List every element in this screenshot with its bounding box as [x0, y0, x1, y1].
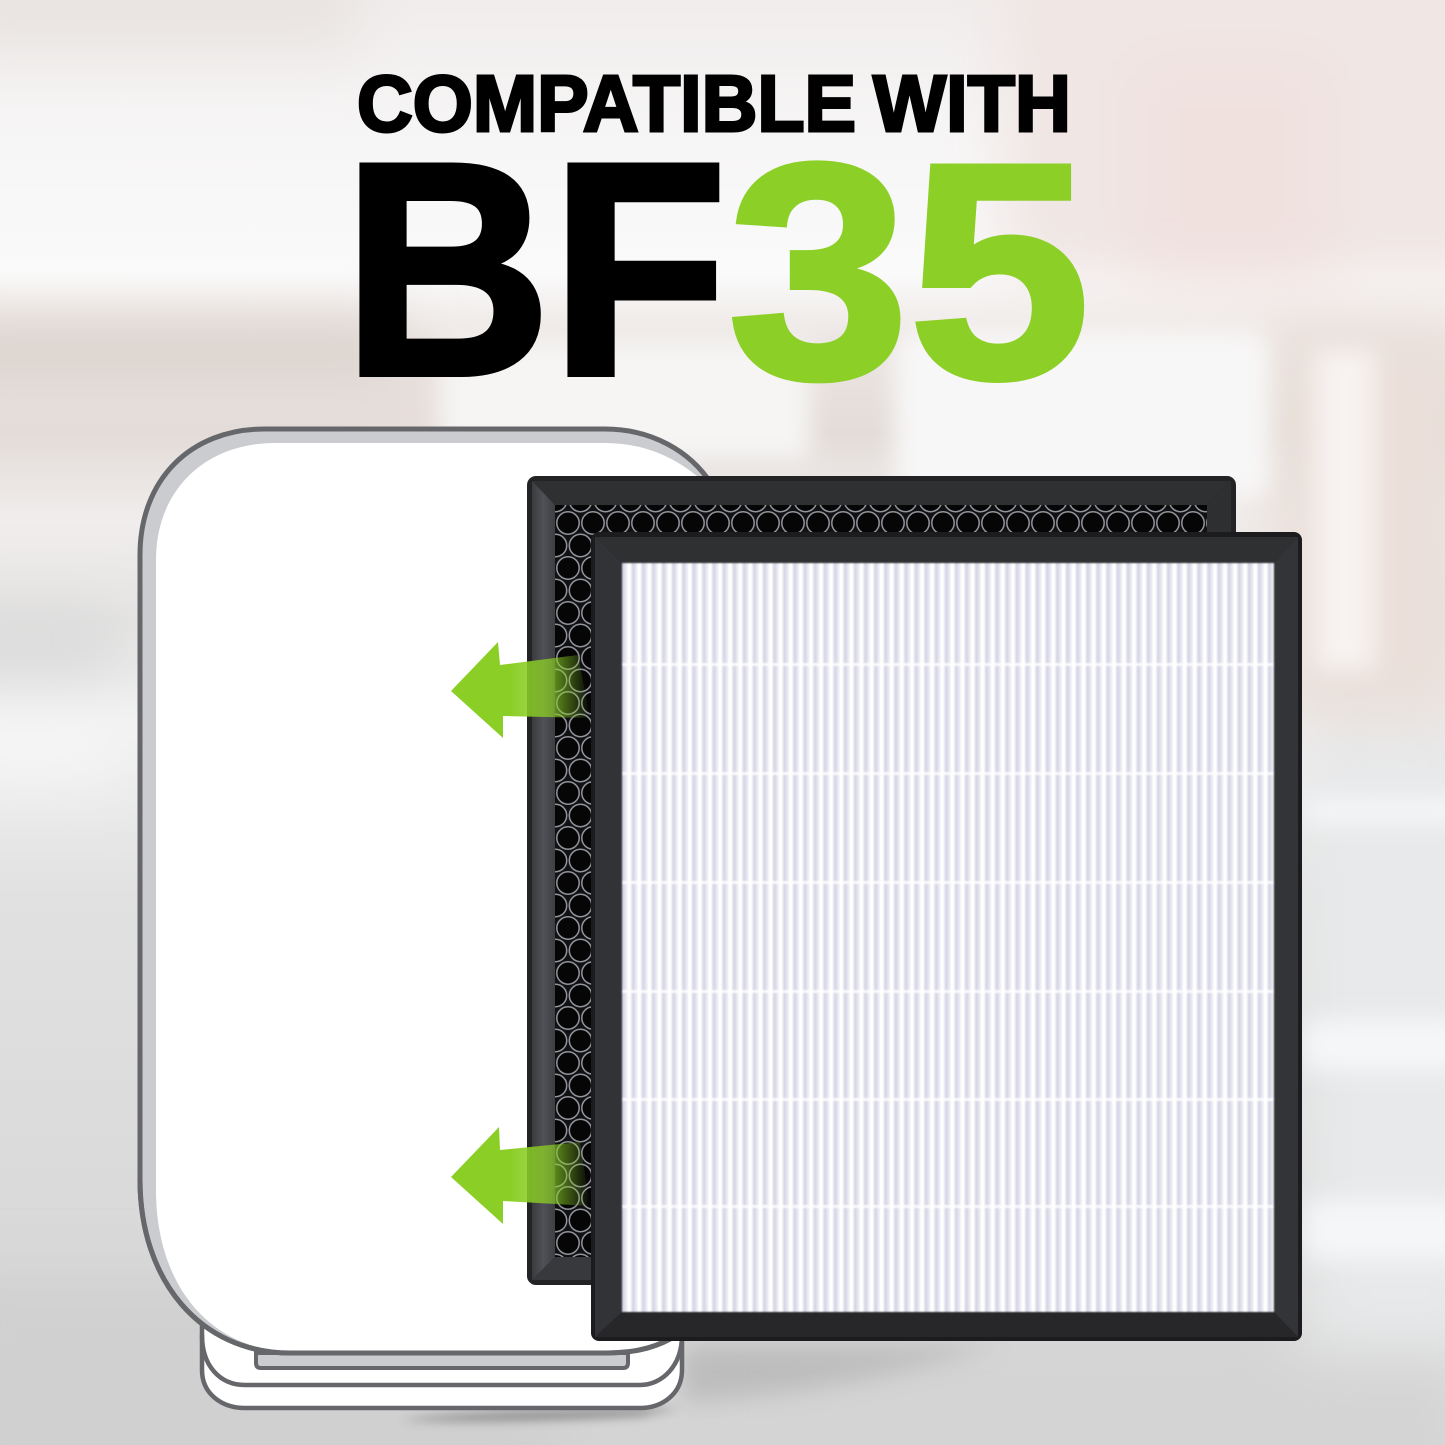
model letters BF: BF [343, 101, 727, 439]
HEPA frame [591, 532, 1302, 1341]
title: compatible with [357, 59, 1071, 148]
purifier base slot [256, 1353, 628, 1368]
purifier base [202, 1325, 682, 1408]
carbon frame bottom face [532, 1257, 620, 1280]
model name: BF35 [343, 100, 1090, 442]
honeycomb carbon media [555, 505, 1207, 1257]
purifier bottom edge [140, 1180, 672, 1353]
title word: with: WITH [873, 59, 1071, 148]
HEPA frame left face [595, 537, 622, 1337]
purifier outer shell [140, 429, 712, 1353]
air purifier outline [140, 429, 712, 1408]
carbon filter frame [527, 476, 1236, 1285]
model digits 35: 35 [728, 100, 1090, 442]
pleated HEPA media [622, 563, 1274, 1312]
arrow: lower airflow [451, 1127, 590, 1224]
HEPA frame bottom face [595, 1312, 1298, 1337]
HEPA frame right face [1274, 537, 1298, 1337]
arrow: upper airflow [451, 642, 590, 738]
title word: compatible: COMPATIBLE [357, 59, 856, 148]
purifier base middle line [202, 1335, 682, 1385]
purifier white front [156, 443, 712, 1351]
carbon frame left face [532, 481, 555, 1280]
carbon frame right face [1207, 481, 1231, 700]
carbon frame top face [532, 481, 1231, 505]
HEPA filter (front) [591, 532, 1302, 1341]
soft shadow under purifier [400, 1345, 1000, 1421]
HEPA frame top face [595, 537, 1298, 563]
carbon filter (rear) [527, 476, 1236, 1285]
